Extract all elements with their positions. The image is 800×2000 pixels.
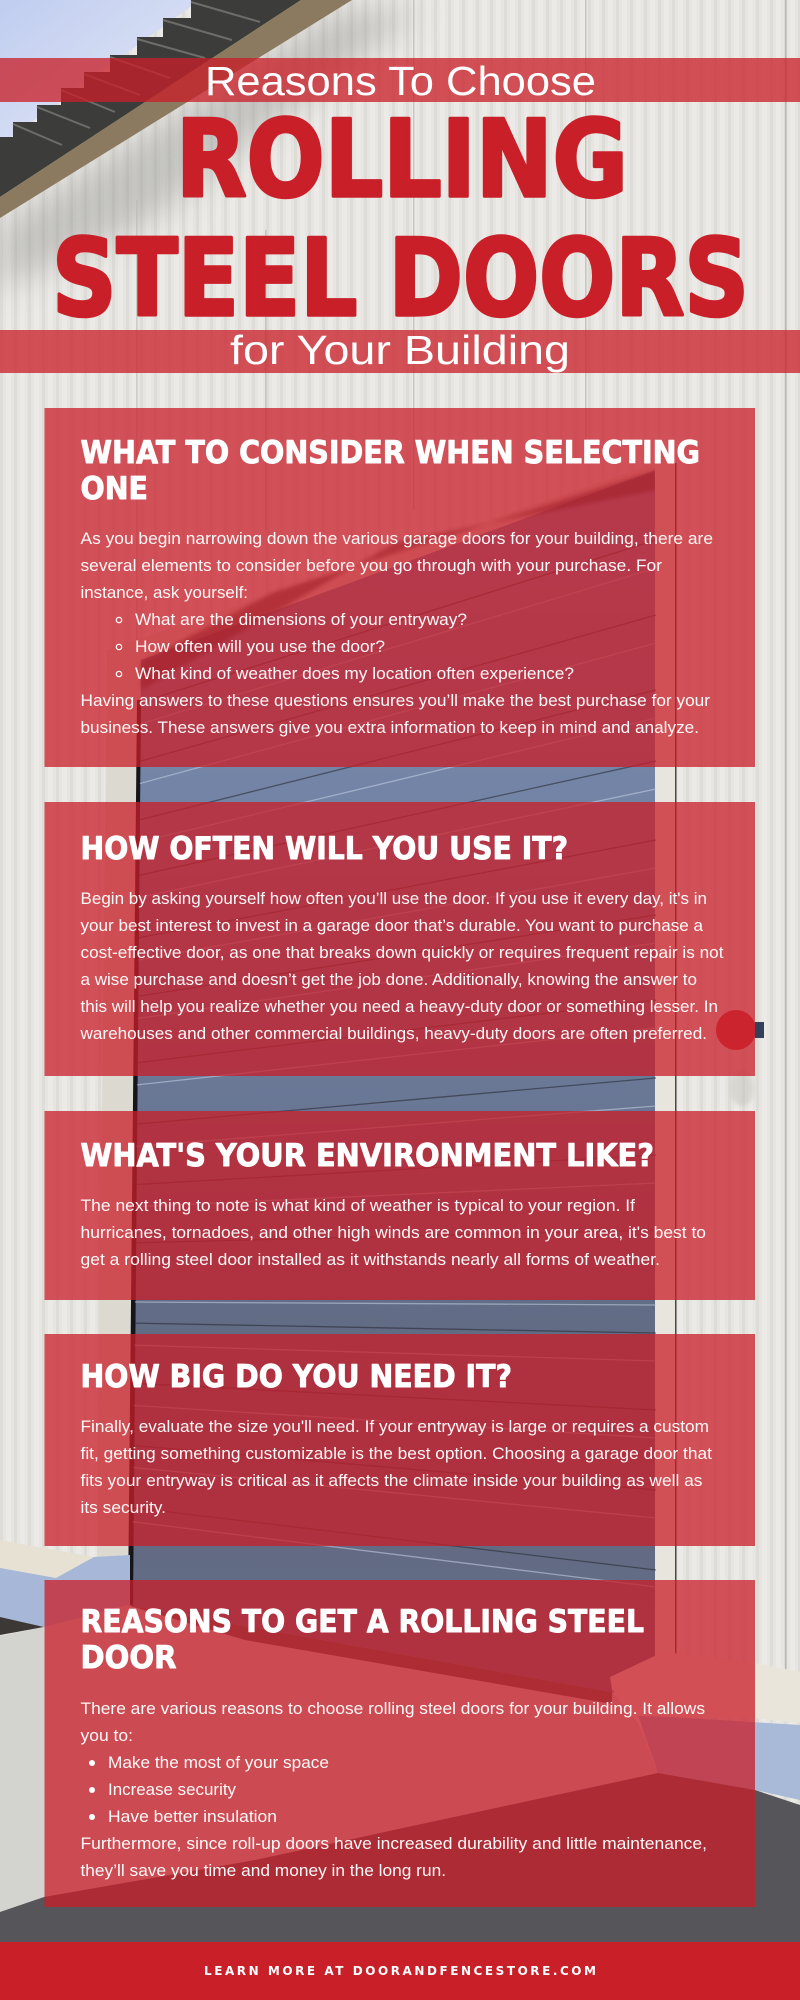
intro text: several elements to consider before you go through with your purchase. For	[80, 557, 663, 575]
body text: warehouses and other commercial buildings, heavy-duty doors are often preferred.	[79, 1025, 707, 1043]
closing text	[80, 1835, 707, 1880]
panel: how often	[44, 802, 755, 1076]
heading	[80, 435, 700, 507]
subtitle top: Reasons To Choose	[205, 58, 596, 104]
body text: a wise purchase and doesn’t get the job done. Additionally, knowing the answer to	[80, 971, 697, 989]
top band	[0, 58, 800, 102]
body text: The next thing to note is what kind of weather is typical to your region. If	[80, 1197, 635, 1215]
footer bar	[0, 1942, 800, 2000]
title	[52, 58, 749, 373]
subtitle bottom: for Your Building	[230, 327, 570, 373]
intro text: instance, ask yourself:	[80, 584, 248, 602]
closing text: Having answers to these questions ensures you’ll make the best purchase for your	[80, 692, 711, 710]
closing text: Furthermore, since roll-up doors have increased durability and little maintenance,	[80, 1835, 707, 1853]
body text: Finally, evaluate the size you'll need. If your entryway is large or requires a custom	[80, 1418, 709, 1436]
body text: fits your entryway is critical as it affects the climate inside your building as well as	[80, 1472, 702, 1490]
intro text: As you begin narrowing down the various garage doors for your building, there are	[80, 530, 713, 548]
body text: fit, getting something customizable is the best option. Choosing a garage door that	[80, 1445, 712, 1463]
body text: Begin by asking yourself how often you’ll use the door. If you use it every day, it's in	[80, 890, 707, 908]
intro text	[80, 1700, 705, 1745]
panel: environment	[44, 1111, 755, 1300]
body text: its security.	[80, 1499, 166, 1517]
heading: HOW BIG DO YOU NEED IT?	[80, 1359, 512, 1395]
heading: REASONS TO GET A ROLLING STEEL	[80, 1604, 644, 1640]
footer call to action: LEARN MORE AT DOORANDFENCESTORE.COM	[204, 1964, 596, 1978]
intro text	[80, 530, 713, 602]
heading	[80, 1604, 644, 1676]
body text	[79, 890, 724, 1043]
intro text: There are various reasons to choose rolling steel doors for your building. It allows	[80, 1700, 705, 1718]
question list: How often will you use the door?	[135, 638, 385, 656]
heading: WHAT TO CONSIDER WHEN SELECTING	[80, 435, 700, 471]
panel: how big	[44, 1334, 755, 1546]
heading: HOW OFTEN WILL YOU USE IT?	[80, 831, 568, 867]
reasons list: Have better insulation	[108, 1808, 277, 1826]
body text: hurricanes, tornadoes, and other high winds are common in your area, it's best to	[80, 1224, 706, 1242]
heading: DOOR	[80, 1640, 177, 1676]
intro text: you to:	[80, 1727, 133, 1745]
body text: your best interest to invest in a garage door that’s durable. You want to purchase a	[80, 917, 704, 935]
closing text: business. These answers give you extra information to keep in mind and analyze.	[80, 719, 699, 737]
closing text	[80, 692, 711, 737]
main title line one: ROLLING	[176, 98, 628, 221]
lower band	[0, 330, 800, 373]
heading: WHAT'S YOUR ENVIRONMENT LIKE?	[80, 1138, 654, 1174]
panel: what to consider	[44, 408, 755, 767]
body text	[80, 1418, 712, 1517]
heading: ONE	[80, 471, 148, 507]
body text	[80, 1197, 706, 1269]
body text: cost-effective door, as one that breaks down quickly or requires frequent repair is not	[80, 944, 724, 962]
closing text: they’ll save you time and money in the long run.	[80, 1862, 446, 1880]
question list	[116, 611, 574, 683]
body text: this will help you realize whether you need a heavy-duty door or something lesser. In	[80, 998, 718, 1016]
reasons list: Make the most of your space	[108, 1754, 329, 1772]
reasons list: Increase security	[108, 1781, 237, 1799]
body text: get a rolling steel door installed as it withstands nearly all forms of weather.	[80, 1251, 660, 1269]
reasons list	[89, 1754, 329, 1826]
question list: What kind of weather does my location often experience?	[135, 665, 574, 683]
question list: What are the dimensions of your entryway?	[135, 611, 467, 629]
panel: reasons	[44, 1580, 755, 1907]
